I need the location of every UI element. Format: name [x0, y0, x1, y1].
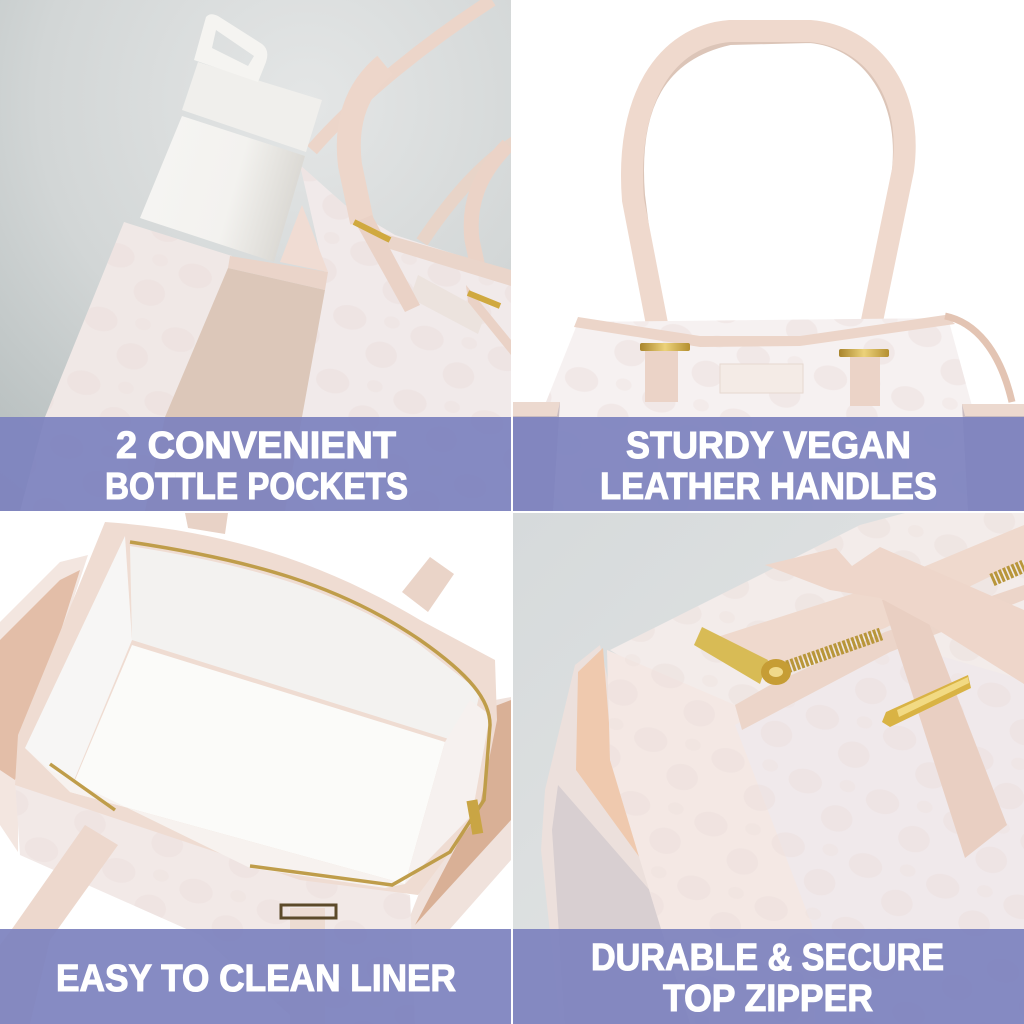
- front handle: [312, 0, 511, 355]
- caption text line 1: DURABLE & SECURE: [591, 937, 944, 979]
- side pockets: [513, 402, 1024, 417]
- caption text line 1: 2 CONVENIENT: [116, 425, 396, 467]
- bag rim: [15, 522, 497, 895]
- caption text line 2: TOP ZIPPER: [663, 978, 873, 1020]
- panel 3 backdrop: [0, 513, 511, 1024]
- panel: bottle pockets: [0, 0, 511, 417]
- caption band: clean liner: [0, 929, 511, 1024]
- bag body: [546, 315, 972, 417]
- panel: easy to clean liner: [0, 513, 511, 929]
- gold strap bar: [882, 675, 971, 727]
- left side pocket: [0, 555, 88, 852]
- panel 1 backdrop: [0, 0, 511, 417]
- caption text line 1: STURDY VEGAN: [626, 425, 911, 467]
- liner interior: [25, 536, 490, 888]
- back handles: [416, 137, 511, 262]
- leather handle: [765, 547, 1024, 684]
- caption band: bottle pockets: [0, 417, 511, 511]
- panel: vegan leather handles: [513, 20, 1024, 417]
- outer pocket fabric: [45, 222, 232, 417]
- back handle: [643, 42, 894, 224]
- zipper teeth: [770, 566, 1024, 673]
- right wall: [405, 700, 490, 884]
- front handle: [632, 31, 905, 350]
- brand label patch: [720, 364, 803, 393]
- left wall: [25, 536, 132, 790]
- panel: top zipper: [513, 513, 1024, 1024]
- panel 2 backdrop: [513, 0, 1024, 511]
- front exterior: [18, 786, 411, 929]
- gold handle hardware: [354, 222, 500, 306]
- caption band: leather handles: [513, 417, 1024, 511]
- side strap: [945, 316, 1012, 402]
- caption text line 2: LEATHER HANDLES: [600, 466, 937, 508]
- front wall strip: [25, 748, 405, 888]
- caption text line 2: BOTTLE POCKETS: [105, 466, 408, 508]
- left pocket: [541, 645, 700, 1024]
- center handle tab: [280, 904, 338, 929]
- zipper trim: [708, 525, 1024, 730]
- bottle cap: [182, 62, 322, 152]
- back wall: [130, 546, 480, 745]
- handle tabs: [645, 348, 880, 406]
- end panel: [607, 650, 820, 1024]
- front handle: [12, 825, 118, 929]
- gold hardware: [640, 343, 889, 357]
- caption band: top zipper: [513, 929, 1024, 1024]
- right side pocket: [405, 697, 511, 929]
- side handle: [402, 557, 454, 612]
- floor: [70, 645, 445, 884]
- vertical leather tab: [882, 595, 1007, 858]
- mesh pocket: [165, 206, 328, 417]
- zipper pull: [466, 799, 483, 835]
- panel 4 backdrop: [513, 513, 1024, 1024]
- bag body: [301, 167, 511, 417]
- top handle stub: [185, 513, 228, 534]
- caption text: EASY TO CLEAN LINER: [56, 958, 456, 1000]
- zipper pull: [694, 627, 791, 685]
- gold zipper: [50, 542, 490, 885]
- water bottle: [140, 14, 322, 262]
- bottle spout loop: [194, 14, 267, 82]
- bag top fabric: [610, 513, 1024, 730]
- front panel: [735, 640, 1024, 1024]
